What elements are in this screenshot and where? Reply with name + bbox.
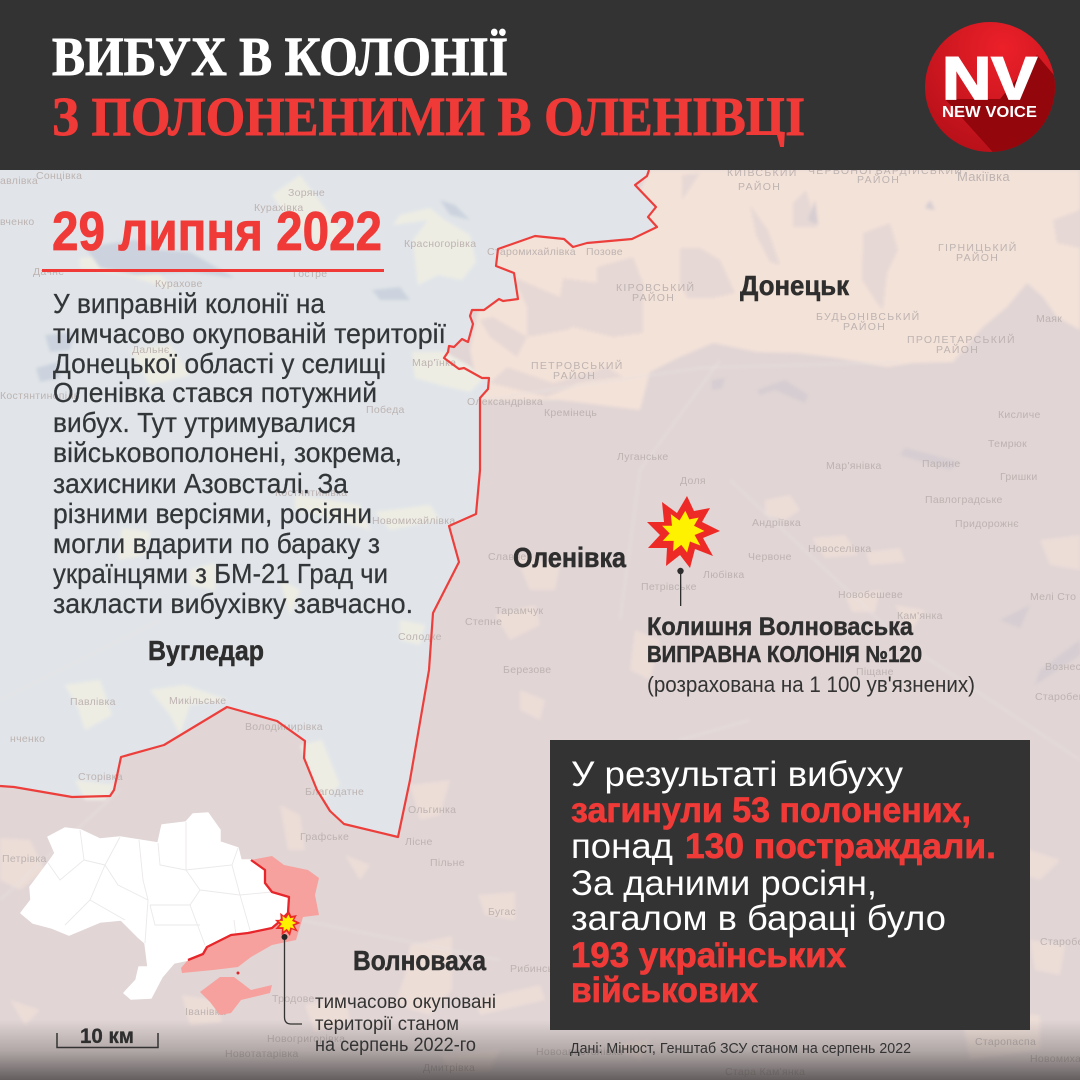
map place names: КІРОВСЬКИЙ [616, 281, 695, 294]
inset legend text: на серпень 2022-го [315, 1035, 476, 1056]
scale bar: 10 км [80, 1025, 134, 1048]
map place names: Старопаспа [975, 1036, 1036, 1048]
map place names: БУДЬОНІВСЬКИЙ [816, 310, 921, 323]
inset legend text [315, 992, 496, 1056]
map place names: Петрівське [641, 581, 697, 593]
body text: різними версіями, росіяни [53, 498, 372, 529]
map place names: Тродове [272, 993, 315, 1005]
map place names: Піщане [856, 666, 894, 678]
map place names: Позове [586, 246, 623, 258]
body text [53, 288, 446, 619]
body text: Донецької області у селищі [53, 348, 386, 379]
map place names: Новотатарівка [225, 1048, 299, 1060]
map place names: Тарамчук [495, 605, 544, 617]
city labels: Оленівка [513, 542, 626, 573]
body text: українцями з БМ-21 Град чи [53, 558, 388, 589]
map place names: РАЙОН [843, 320, 886, 333]
colony label [647, 613, 975, 697]
map place names: Луганське [617, 451, 668, 463]
logo: NV New Voice: NV [942, 45, 1037, 112]
callout box [550, 740, 1030, 1030]
occupied Crimea [200, 977, 272, 1015]
map place names: Придорожнє [955, 518, 1019, 530]
map place names: Володимирівка [245, 721, 323, 733]
map place names: Павлоградське [925, 494, 1003, 506]
body text: У виправній колонії на [53, 288, 326, 319]
body text: вибух. Тут утримувалися [53, 407, 356, 438]
colony label: Колишня Волноваська [647, 613, 914, 641]
roads [0, 360, 1080, 960]
city labels: Донецьк [740, 270, 850, 301]
map place names: Солодке [398, 631, 442, 643]
callout box: військових [571, 971, 759, 1010]
reservoirs [36, 200, 470, 382]
map place names: Старомихайлівка [487, 246, 576, 258]
map place names: Петрівка [2, 853, 47, 865]
map place names: Мар'янівка [826, 460, 882, 472]
map place names: РАЙОН [956, 251, 999, 264]
inset explosion [275, 911, 300, 936]
map place names: Курахове [155, 278, 203, 290]
bottom shading [0, 1020, 1080, 1080]
map place names: Андріївка [752, 517, 801, 529]
inset front line [188, 860, 289, 960]
map place names: ПРОЛЕТАРСЬКИЙ [907, 333, 1016, 346]
map place names: Кремінець [544, 407, 597, 419]
map place names: КИЇВСЬКИЙ [727, 166, 798, 179]
map place names: ЧЕРВОНОГВАРДІЙСЬКИЙ [808, 164, 963, 177]
map place names: Маяк [1036, 313, 1062, 325]
inset legend text: території станом [315, 1014, 459, 1035]
date heading: 29 липня 2022 [52, 200, 382, 262]
map place names: Бугас [488, 906, 516, 918]
callout box: понад [571, 827, 673, 866]
inset Crimea marker [236, 972, 240, 974]
map place names: авлівка [0, 175, 38, 187]
map place names: Стара Кам'янка [725, 1066, 805, 1078]
map place names: Кам'янка [897, 610, 943, 622]
map place names: Зоряне [288, 187, 325, 199]
logo: NV New Voice: NEW VOICE [942, 104, 1037, 121]
map place names: Новоселівка [808, 543, 871, 555]
map place names: Гостре [293, 268, 327, 280]
occupied city area: Donetsk [470, 170, 1080, 410]
colony label: (розрахована на 1 100 ув'язнених) [647, 672, 975, 697]
map place names: Пільне [430, 857, 465, 869]
colony label: ВИПРАВНА КОЛОНІЯ №120 [647, 641, 922, 667]
map place names: Березове [503, 664, 551, 676]
inset explosion core [279, 915, 296, 932]
map place names: Сторівка [78, 771, 123, 783]
map place names: РАЙОН [738, 180, 781, 193]
map place names: Сонцівка [36, 170, 82, 182]
header band [0, 0, 1080, 170]
title: З ПОЛОНЕНИМИ В ОЛЕНІВЦІ [52, 86, 805, 147]
map place names: РАЙОН [553, 369, 596, 382]
map place names: Олександрівка [467, 396, 543, 408]
map place names: Степне [465, 616, 502, 628]
map place names: РАЙОН [936, 343, 979, 356]
callout box: загалом в бараці було [571, 899, 946, 938]
map place names: Павлівка [70, 696, 116, 708]
oblast borders [48, 822, 272, 945]
map place names: Гришки [1000, 471, 1037, 483]
inset map: Ukraine [21, 813, 319, 1024]
map place names: Костянтинопіль [0, 390, 80, 402]
map place names: РАЙОН [632, 291, 675, 304]
body text: захисники Азовсталі. За [53, 468, 349, 499]
inset pointer [284, 937, 302, 1024]
map place names: ПЕТРОВСЬКИЙ [531, 359, 624, 372]
map place names: Іванівка [185, 1006, 226, 1018]
map place names: Макіївка [957, 169, 1010, 184]
map place names: Лісне [405, 836, 433, 848]
map place names: Микільське [169, 695, 226, 707]
map place names: вченко [0, 216, 35, 228]
map place names: Славне [488, 551, 527, 563]
ponds in occupied territory [712, 200, 1080, 685]
map place names: Курахівка [254, 202, 303, 214]
body text: закласти вибухівку завчасно. [53, 588, 413, 619]
free part of Ukraine [21, 813, 289, 999]
map place names: Рибинське [510, 963, 565, 975]
settlements in free territory [65, 175, 484, 800]
free territory [0, 170, 657, 837]
map place names: Кисличе [998, 409, 1041, 421]
city labels: Волноваха [353, 945, 486, 976]
map place names: Костянтинівка [275, 487, 347, 499]
icon: explosion marker [647, 496, 720, 568]
city labels [148, 270, 850, 976]
map place names: Червоне [748, 551, 792, 563]
scale bar [57, 1025, 158, 1048]
callout box: загинули 53 полонених, [571, 791, 971, 830]
body text: тимчасово окупованій території [53, 318, 446, 349]
body text: могли вдарити по бараку з [53, 528, 380, 559]
map place names: Мар'їнка [412, 357, 456, 369]
source note: Дані: Мінюст, Генштаб ЗСУ станом на серпень 2022 [570, 1041, 911, 1057]
inset dot [282, 934, 288, 940]
map place names: РАЙОН [857, 173, 900, 186]
city labels: Вугледар [148, 635, 264, 666]
logo: NV New Voice [925, 22, 1055, 152]
map place names: нченко [10, 733, 45, 745]
map place names: Победа [366, 404, 405, 416]
callout box: У результаті вибуху [571, 755, 904, 794]
map place names: Дачне [33, 266, 64, 278]
map place names: Благодатне [305, 786, 364, 798]
settlements in occupied territory [0, 495, 1080, 1070]
map place names: Новобешеве [838, 589, 903, 601]
map place names: Мелі Сто [1030, 591, 1076, 603]
map place names: Новомихайлівка [372, 515, 456, 527]
callout box: 130 постраждали. [685, 827, 996, 866]
map place names: Ольгинка [408, 804, 456, 816]
title: ВИБУХ В КОЛОНІЇ [52, 26, 508, 87]
map place names: Новоапостолівка [536, 1046, 623, 1058]
callout box: 193 українських [571, 936, 847, 975]
map place names: Темрюк [988, 438, 1027, 450]
map place names: Парине [922, 458, 961, 470]
map place names: Красногорівка [404, 238, 476, 250]
body text: Оленівка стався потужний [53, 377, 377, 408]
map place names: Новогригорівка [267, 1033, 345, 1045]
title [52, 26, 805, 147]
map place names: Доля [680, 475, 706, 487]
map place names: Любівка [703, 569, 744, 581]
pointer: explosion to colony label [677, 568, 684, 606]
map place names: Дальнє [132, 344, 170, 356]
callout box: За даними росіян, [571, 864, 877, 903]
occupied part north-east [181, 856, 319, 973]
map place names: ГІРНИЦЬКИЙ [938, 241, 1018, 254]
map place names: Графське [300, 831, 349, 843]
map place names: Дмитрівка [423, 1062, 475, 1074]
front line border [0, 170, 657, 837]
body text: військовополонені, зокрема, [53, 437, 402, 468]
inset legend text: тимчасово окуповані [315, 992, 496, 1013]
